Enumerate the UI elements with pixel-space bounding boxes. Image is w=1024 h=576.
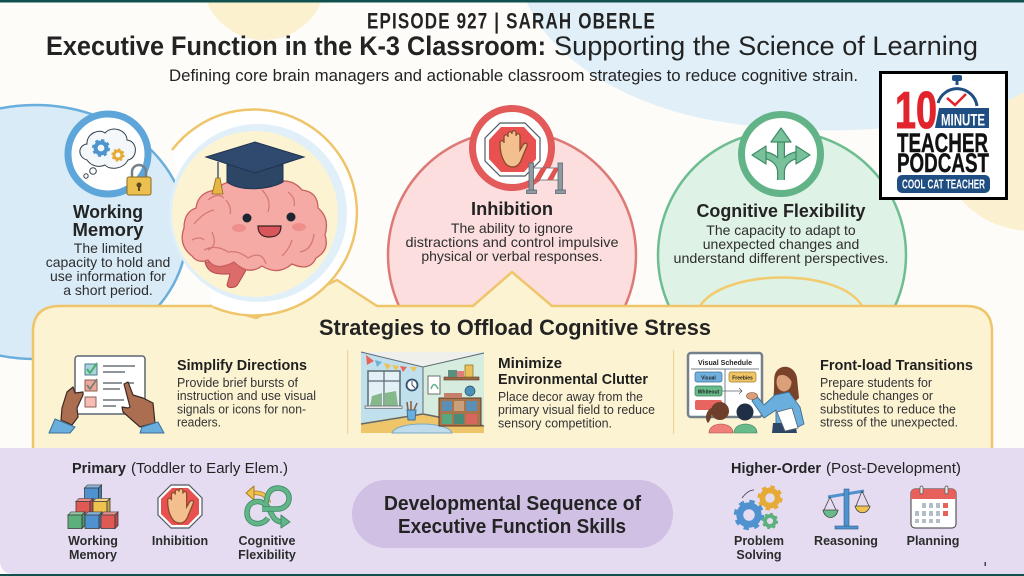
face [232, 212, 306, 237]
higher-order heading: (Post-Development) [826, 460, 961, 477]
label: Reasoning [814, 534, 878, 548]
central brain illustration [169, 109, 357, 315]
logo podcast: PODCAST [897, 148, 989, 178]
header [46, 8, 978, 85]
icon: gears [736, 487, 781, 528]
label: Solving [736, 548, 782, 562]
title: Supporting the Science of Learning [554, 31, 978, 61]
label: Flexibility [238, 548, 296, 562]
strategy: minimize environmental clutter [498, 355, 655, 430]
strategy text: signals or icons for non- [177, 402, 306, 416]
label: Planning [907, 534, 959, 548]
episode line: EPISODE 927 | SARAH OBERLE [367, 8, 656, 34]
pill heading: Developmental Sequence of [384, 493, 641, 515]
strategy text: instruction and use visual [177, 389, 316, 403]
strategy heading: Environmental Clutter [498, 371, 648, 388]
panel: developmental sequence band [0, 448, 1024, 574]
inhibition content [406, 108, 619, 264]
strategy text: schedule changes or [820, 389, 933, 403]
description: understand different perspectives. [674, 250, 888, 266]
logo teacher: TEACHER [897, 128, 988, 158]
icon: diverging arrows [742, 114, 820, 194]
strategy text: stress of the unexpected. [820, 416, 958, 430]
stopwatch [938, 75, 977, 106]
heading: Strategies to Offload Cognitive Stress [319, 315, 711, 340]
logo: 10 minute teacher podcast [880, 72, 1006, 198]
panel: working memory [0, 105, 187, 359]
strategy text: substitutes to reduce the [820, 402, 956, 416]
center pill [352, 480, 673, 548]
heading line 2: Memory [72, 220, 144, 240]
description: a short period. [63, 282, 153, 298]
label: Inhibition [152, 534, 208, 548]
strategy text: Prepare students for [820, 376, 932, 390]
primary heading: Primary [72, 460, 127, 477]
brain stem [205, 262, 250, 288]
strategy text: readers. [177, 416, 221, 430]
subtitle: Defining core brain managers and actionable classroom strategies to reduce cognitive strain. [169, 67, 858, 85]
label: Memory [69, 548, 117, 562]
label: Problem [734, 534, 784, 548]
icon: blocks [68, 485, 118, 528]
panel background [0, 105, 187, 359]
decorative arc [700, 278, 862, 306]
band background [0, 448, 1024, 574]
strategy text: Place decor away from the [498, 390, 643, 404]
icon: teacher with visual schedule: Visual [701, 376, 716, 382]
label: Cognitive [239, 534, 296, 548]
panel background [33, 272, 992, 450]
title: Executive Function in the K-3 Classroom: [46, 31, 546, 61]
panel: strategies [33, 272, 992, 450]
description: The ability to ignore [451, 220, 573, 236]
bottom border [0, 574, 1024, 576]
description: distractions and control impulsive [406, 234, 619, 250]
icon: stop sign [472, 108, 552, 188]
icon: balance scale [823, 489, 870, 529]
speck [984, 562, 986, 566]
cream disc [172, 131, 338, 297]
yellow ring arc [172, 109, 357, 315]
description: capacity to hold and [46, 254, 170, 270]
icon: winding arrows [246, 486, 290, 528]
icon: stop sign small [158, 485, 202, 528]
outer ring fill [172, 109, 357, 315]
pill heading: Executive Function Skills [398, 516, 626, 538]
description: The capacity to adapt to [706, 222, 856, 238]
description: unexpected changes and [703, 236, 859, 252]
graduation cap [206, 142, 304, 194]
divider left [347, 350, 348, 434]
strategy text: Provide brief bursts of [177, 376, 299, 390]
logo number: 10 [895, 82, 937, 140]
decorative blob: cream right [940, 59, 1024, 231]
description: The limited [74, 240, 142, 256]
pale blue ring [169, 124, 347, 302]
icon: calendar [911, 486, 956, 528]
panel: inhibition circle [388, 131, 636, 379]
strategy heading: Minimize [498, 355, 562, 372]
icon: checklist with hands [49, 356, 164, 433]
strategy: simplify directions [177, 357, 316, 430]
strategy: front-load transitions [820, 357, 973, 430]
heading: Inhibition [471, 199, 553, 219]
strategy text: primary visual field to reduce [498, 403, 655, 417]
icon: classroom illustration [361, 352, 484, 433]
minute badge: MINUTE [941, 110, 985, 130]
label: Working [68, 534, 118, 548]
decorative blob: blue top right [526, 0, 1024, 130]
icon: teacher with visual schedule: Whiteout [698, 390, 720, 396]
primary heading: (Toddler to Early Elem.) [131, 460, 288, 477]
higher-order heading: Higher-Order [731, 460, 821, 477]
icon: teacher with visual schedule: Freebies [732, 376, 753, 382]
decorative blob: cream top [202, 0, 326, 40]
icon: barricade [526, 163, 566, 194]
icon: teacher with visual schedule: Visual Schedule [698, 360, 752, 367]
brain folds [192, 190, 314, 264]
logo frame [880, 72, 1006, 198]
strategy text: sensory competition. [498, 416, 612, 430]
top border [0, 0, 1024, 2]
brain [182, 181, 326, 271]
icon: thought cloud with gears and lock [68, 114, 151, 195]
cognitive flexibility content [674, 114, 888, 266]
heading: Working [73, 202, 143, 222]
strategy heading: Front-load Transitions [820, 357, 973, 374]
description: physical or verbal responses. [421, 248, 603, 264]
description: use information for [50, 268, 166, 284]
heading: Cognitive Flexibility [696, 201, 866, 221]
panel: cognitive flexibility circle [658, 131, 906, 379]
divider right [673, 350, 674, 434]
icon: teacher with visual schedule [688, 353, 804, 433]
strategy heading: Simplify Directions [177, 357, 307, 374]
